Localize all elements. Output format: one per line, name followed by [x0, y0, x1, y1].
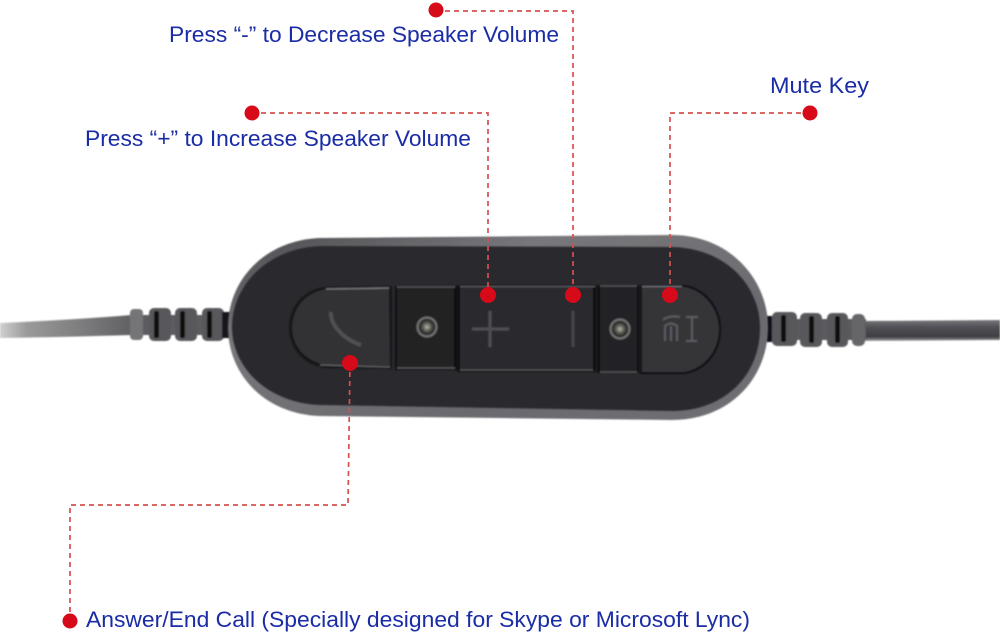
volume rocker button	[457, 285, 596, 372]
mute button	[640, 285, 721, 374]
right strain relief	[766, 312, 866, 347]
label: decrease volume: Press “-” to Decrease Speaker Volume	[169, 22, 559, 47]
label: answer/end call: Answer/End Call (Specially designed for Skype or Microsoft Lync)	[86, 607, 750, 632]
left strain relief	[130, 308, 231, 341]
right cable	[766, 312, 1000, 347]
indicator light	[416, 316, 438, 338]
callout leader lines	[70, 11, 810, 620]
left cable	[0, 308, 231, 341]
icon: minus	[572, 311, 574, 347]
control unit body	[228, 235, 768, 420]
icon: phone handset	[331, 312, 361, 345]
label: mute key: Mute Key	[770, 73, 869, 98]
label: increase volume: Press “+” to Increase Speaker Volume	[85, 126, 471, 151]
left indicator block	[395, 286, 457, 370]
right indicator block	[597, 285, 639, 373]
callout dots	[62, 2, 818, 628]
icon: mute symbol	[663, 316, 698, 341]
indicator light	[609, 318, 631, 340]
answer/end call button	[289, 286, 392, 369]
icon: plus	[472, 311, 509, 347]
